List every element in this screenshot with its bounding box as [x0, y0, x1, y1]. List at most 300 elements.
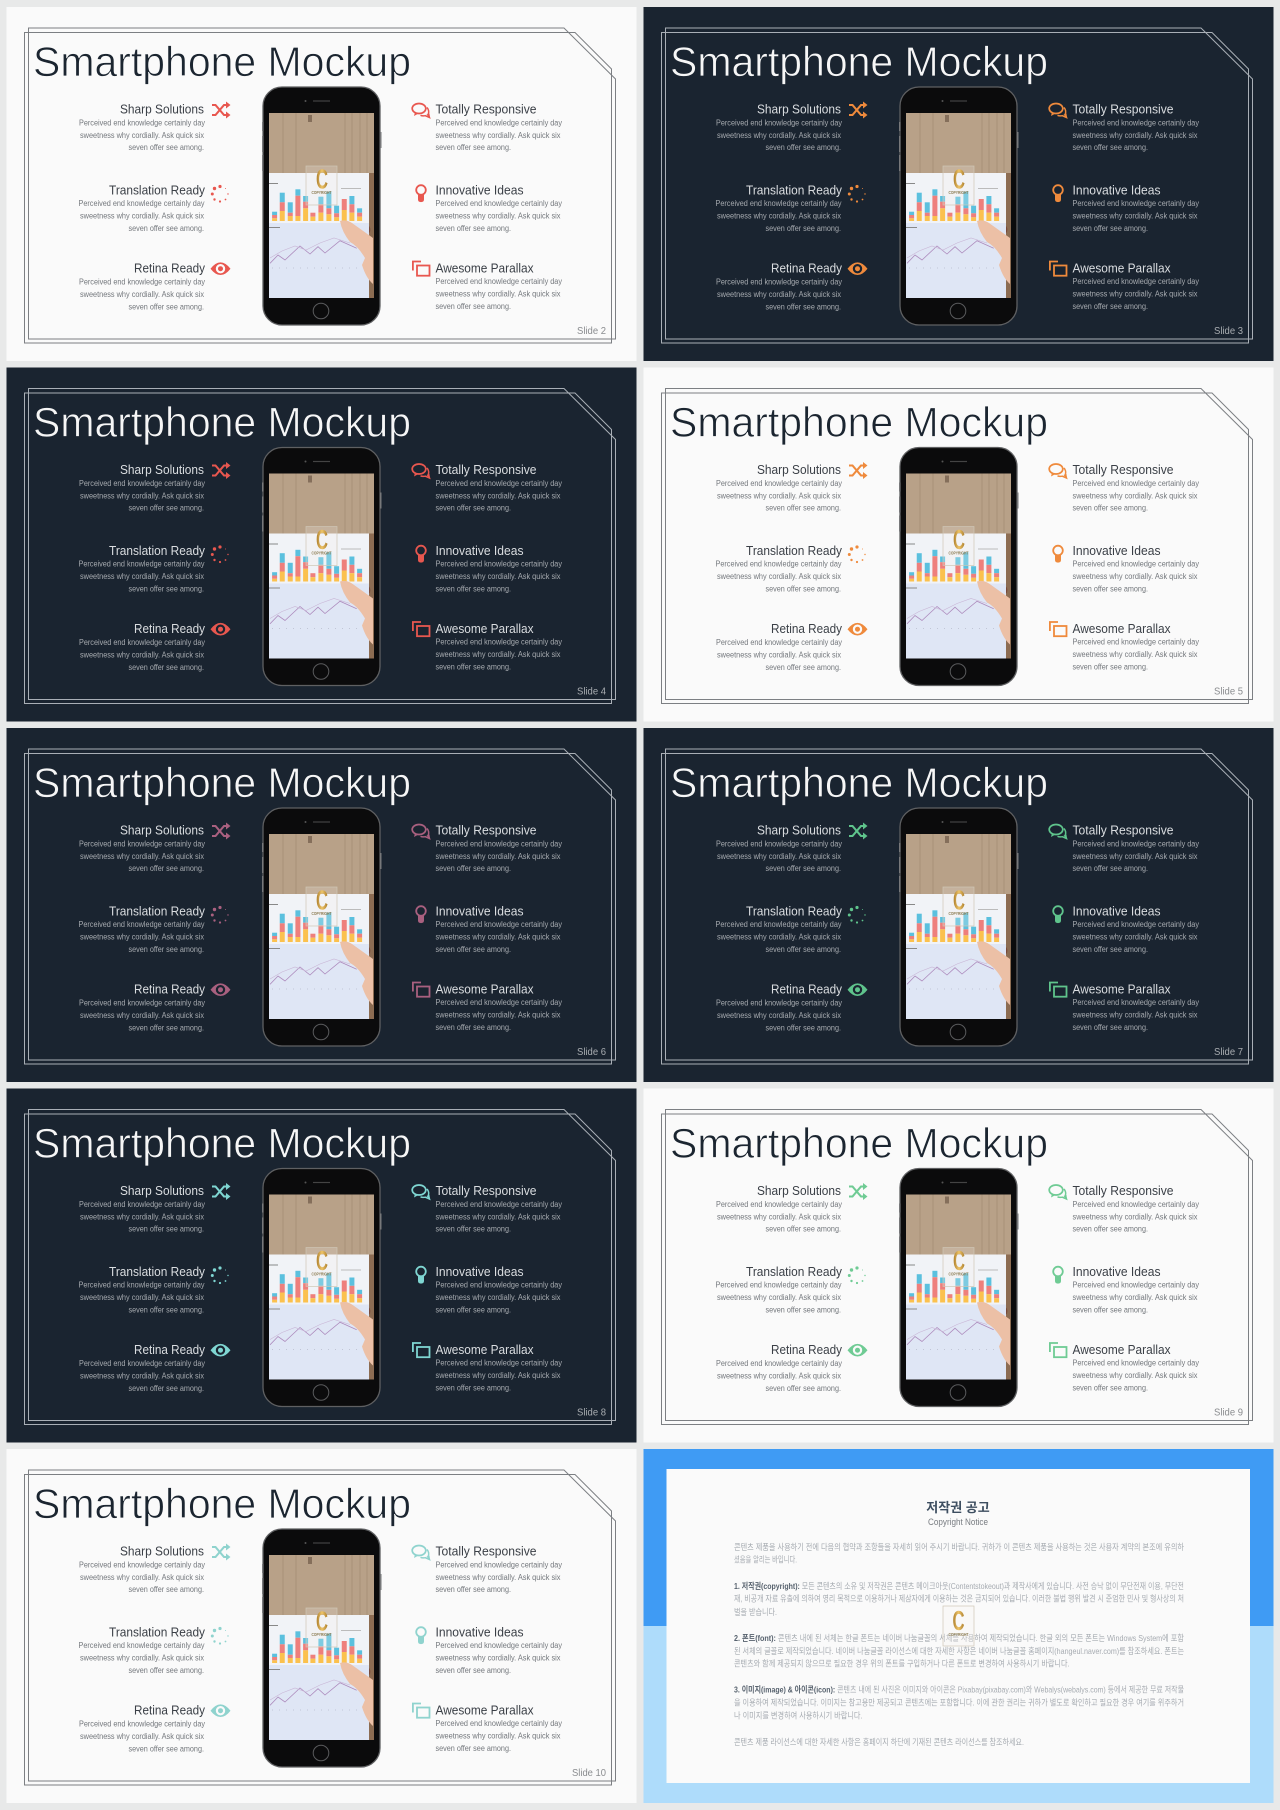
slide number: Slide 6 — [577, 1047, 606, 1058]
notice paragraph 1: copyright — [734, 1580, 1184, 1617]
feature: Retina Ready: Retina Ready — [134, 1704, 206, 1718]
icon: shuffle — [212, 822, 230, 840]
feature: Retina Ready: Retina Ready — [771, 622, 843, 636]
feature: Innovative Ideas: Innovative Ideas — [436, 544, 524, 558]
feature: Sharp Solutions — [79, 463, 205, 512]
phone mockup — [899, 808, 1018, 1046]
feature: Translation Ready: seven offer see among. — [128, 1306, 204, 1314]
feature: Sharp Solutions: sweetness why cordially. Ask quick six — [717, 852, 841, 861]
feature: Awesome Parallax: Awesome Parallax — [436, 622, 534, 636]
feature: Totally Responsive — [1072, 102, 1199, 152]
feature: Retina Ready: Perceived end knowledge certainly day — [79, 638, 205, 647]
feature: Translation Ready: Perceived end knowledge certainly day — [78, 199, 204, 208]
panel: slide 5, white with orange icons — [644, 368, 1274, 722]
feature: Translation Ready: Perceived end knowledge certainly day — [78, 560, 204, 568]
feature: Retina Ready: Retina Ready — [134, 982, 206, 996]
feature: Innovative Ideas: Perceived end knowledge certainly day — [436, 199, 562, 208]
feature: Innovative Ideas: seven offer see among. — [1072, 584, 1148, 594]
notice intro paragraph: 콘텐츠 제품을 사용하기 전에 다음의 협약과 조항들을 자세히 읽어 주시기 바랍니다. 귀하가 이 콘텐츠 제품을 사용하는 것은 사용자 계약의 본조에 유의하 — [734, 1541, 1184, 1552]
feature: Innovative Ideas: Innovative Ideas — [436, 1626, 524, 1640]
feature: Sharp Solutions: sweetness why cordially. Ask quick six — [80, 492, 204, 500]
feature: Translation Ready — [78, 904, 206, 954]
feature: Innovative Ideas: Innovative Ideas — [436, 904, 524, 918]
feature: Translation Ready — [78, 1626, 206, 1675]
feature: Innovative Ideas: Perceived end knowledge certainly day — [436, 560, 562, 568]
icon: overlapping squares — [1050, 622, 1066, 636]
icon: eye — [848, 1344, 868, 1357]
icon: spinner — [211, 1266, 229, 1284]
feature: Awesome Parallax — [436, 1343, 562, 1392]
feature: Awesome Parallax: sweetness why cordially. Ask quick six — [436, 1371, 560, 1380]
feature: Sharp Solutions: seven offer see among. — [128, 143, 204, 152]
feature: Awesome Parallax: seven offer see among. — [436, 1744, 511, 1753]
feature: Awesome Parallax: Awesome Parallax — [1072, 622, 1171, 636]
feature: Sharp Solutions: Perceived end knowledge certainly day — [79, 479, 205, 488]
icon: chat bubbles — [1049, 464, 1067, 479]
panel: slide 6, dark with mauve icons — [6, 728, 636, 1082]
feature: Awesome Parallax: Awesome Parallax — [1072, 262, 1171, 276]
feature: Sharp Solutions: sweetness why cordially. Ask quick six — [80, 1212, 204, 1222]
feature: Translation Ready: Perceived end knowledge certainly day — [78, 1641, 204, 1650]
feature: Awesome Parallax — [436, 622, 562, 672]
feature: Innovative Ideas — [1072, 904, 1199, 954]
feature: Awesome Parallax: sweetness why cordially. Ask quick six — [1072, 650, 1198, 659]
feature: Retina Ready — [79, 622, 206, 672]
feature: Totally Responsive: Totally Responsive — [436, 1184, 537, 1198]
feature: Totally Responsive: sweetness why cordially. Ask quick six — [1072, 492, 1198, 500]
feature: Retina Ready — [79, 262, 206, 311]
feature: Retina Ready: Retina Ready — [771, 262, 843, 276]
feature: Translation Ready: seven offer see among. — [128, 1666, 204, 1675]
feature: Innovative Ideas — [436, 184, 562, 233]
feature: Innovative Ideas: sweetness why cordially. Ask quick six — [436, 1654, 560, 1662]
feature: Translation Ready: seven offer see among. — [766, 224, 841, 233]
feature: Retina Ready: seven offer see among. — [766, 302, 841, 311]
feature: Sharp Solutions: Perceived end knowledge certainly day — [716, 118, 842, 128]
icon: eye — [210, 262, 230, 275]
feature: Translation Ready: sweetness why cordially. Ask quick six — [80, 932, 204, 942]
notice paragraph 3: images and icons — [734, 1684, 1184, 1720]
icon: shuffle — [212, 1544, 230, 1560]
feature: Totally Responsive: Totally Responsive — [436, 1544, 537, 1558]
feature: Translation Ready: sweetness why cordially. Ask quick six — [80, 1654, 204, 1662]
slide number: Slide 2 — [577, 326, 606, 337]
feature: Translation Ready: seven offer see among. — [766, 584, 841, 594]
feature: Retina Ready: Perceived end knowledge certainly day — [79, 999, 205, 1008]
feature: Awesome Parallax — [1072, 262, 1199, 311]
feature: Totally Responsive: Perceived end knowledge certainly day — [436, 1560, 562, 1570]
icon: light bulb — [416, 546, 426, 563]
feature: Retina Ready: Perceived end knowledge certainly day — [716, 638, 842, 647]
feature: Sharp Solutions — [716, 1184, 842, 1234]
feature: Sharp Solutions: Perceived end knowledge certainly day — [716, 840, 842, 848]
notice paragraph 1: copyright: 1. 저작권(copyright): 모든 콘텐츠의 소유 및 저작권은 콘텐츠 메이크아웃(Contentstokeout)과 제작사에게 있습니다. 사전 승낙 없이 무단전재 이용, 무단전 — [734, 1580, 1184, 1591]
feature: Translation Ready — [716, 184, 843, 233]
feature: Totally Responsive: seven offer see among. — [436, 504, 511, 512]
feature: Translation Ready — [78, 1265, 206, 1314]
icon: shuffle — [212, 1183, 230, 1200]
icon: eye — [210, 623, 230, 636]
feature: Translation Ready: Translation Ready — [109, 544, 206, 558]
feature: Innovative Ideas — [436, 1265, 562, 1314]
feature: Totally Responsive: seven offer see among. — [1072, 143, 1148, 152]
icon: spinner — [848, 185, 866, 203]
feature: Awesome Parallax: Perceived end knowledge certainly day — [1072, 1359, 1199, 1368]
icon: spinner — [848, 1266, 866, 1284]
icon: chat bubbles — [412, 464, 430, 479]
feature: Translation Ready: Translation Ready — [109, 184, 206, 198]
feature: Retina Ready — [716, 262, 843, 311]
icon: chat bubbles — [412, 1185, 430, 1200]
feature: Innovative Ideas — [436, 544, 562, 594]
feature: Awesome Parallax: seven offer see among. — [1072, 662, 1148, 672]
phone mockup — [899, 87, 1018, 325]
feature: Totally Responsive: sweetness why cordially. Ask quick six — [436, 1212, 560, 1222]
feature: Innovative Ideas: seven offer see among. — [436, 1306, 511, 1314]
icon: shuffle — [849, 822, 868, 840]
icon: eye — [210, 1344, 230, 1357]
feature: Awesome Parallax: seven offer see among. — [436, 1384, 511, 1392]
title: Smartphone Mockup — [670, 38, 1048, 85]
feature: Translation Ready: Perceived end knowledge certainly day — [716, 560, 842, 568]
phone mockup — [262, 1168, 382, 1406]
feature: Totally Responsive — [1072, 463, 1199, 512]
feature: Sharp Solutions: seven offer see among. — [766, 143, 841, 152]
feature: Innovative Ideas: seven offer see among. — [436, 1666, 511, 1675]
feature: Totally Responsive — [436, 1544, 562, 1594]
feature: Translation Ready — [78, 544, 206, 594]
feature: Retina Ready: seven offer see among. — [128, 1023, 204, 1032]
feature: Sharp Solutions: Sharp Solutions — [757, 824, 841, 838]
feature: Innovative Ideas: sweetness why cordially. Ask quick six — [436, 1293, 560, 1302]
feature: Translation Ready: sweetness why cordially. Ask quick six — [80, 212, 204, 220]
feature: Innovative Ideas: sweetness why cordially. Ask quick six — [436, 572, 560, 581]
feature: Awesome Parallax: seven offer see among. — [1072, 1384, 1148, 1392]
feature: Sharp Solutions: Perceived end knowledge certainly day — [79, 118, 205, 128]
feature: Innovative Ideas: seven offer see among. — [436, 945, 511, 954]
feature: Translation Ready: seven offer see among. — [128, 224, 204, 233]
feature: Totally Responsive: seven offer see among. — [436, 1224, 511, 1234]
feature: Retina Ready — [716, 622, 843, 672]
feature: Translation Ready: Translation Ready — [746, 904, 843, 918]
icon: eye — [210, 1704, 230, 1717]
feature: Sharp Solutions — [716, 102, 842, 152]
feature: Sharp Solutions: seven offer see among. — [128, 1585, 204, 1594]
slide number: Slide 4 — [577, 686, 606, 698]
feature: Innovative Ideas: sweetness why cordially. Ask quick six — [1072, 932, 1198, 942]
feature: Translation Ready: seven offer see among. — [128, 945, 204, 954]
icon: eye — [848, 983, 868, 996]
feature: Awesome Parallax: Awesome Parallax — [1072, 982, 1171, 996]
feature: Innovative Ideas: seven offer see among. — [1072, 1306, 1148, 1314]
feature: Totally Responsive: Perceived end knowledge certainly day — [436, 479, 562, 488]
notice subheading: Copyright Notice — [928, 1517, 988, 1527]
icon: light bulb — [1053, 906, 1063, 923]
feature: Totally Responsive: Perceived end knowledge certainly day — [436, 1200, 562, 1209]
feature: Sharp Solutions — [79, 102, 205, 152]
feature: Totally Responsive: Totally Responsive — [1072, 824, 1174, 838]
icon: eye — [848, 262, 868, 275]
title: Smartphone Mockup — [33, 38, 411, 85]
icon: shuffle — [212, 102, 230, 118]
feature: Innovative Ideas: Perceived end knowledge certainly day — [1072, 560, 1199, 568]
feature: Translation Ready — [78, 184, 206, 233]
slide number: Slide 3 — [1214, 326, 1243, 337]
icon: overlapping squares — [413, 982, 430, 997]
feature: Totally Responsive: Totally Responsive — [1072, 102, 1174, 116]
feature: Totally Responsive: sweetness why cordially. Ask quick six — [1072, 131, 1198, 140]
feature: Retina Ready: sweetness why cordially. Ask quick six — [80, 1011, 204, 1020]
feature: Translation Ready: seven offer see among. — [128, 584, 204, 594]
feature: Sharp Solutions: sweetness why cordially. Ask quick six — [80, 131, 204, 140]
feature: Translation Ready: sweetness why cordially. Ask quick six — [80, 1293, 204, 1302]
title: Smartphone Mockup — [670, 398, 1048, 446]
panel: slide 7, dark with green icons — [644, 728, 1274, 1082]
feature: Innovative Ideas — [436, 904, 562, 954]
feature: Innovative Ideas — [1072, 544, 1199, 594]
feature: Retina Ready — [79, 1704, 206, 1753]
feature: Totally Responsive: Perceived end knowledge certainly day — [1072, 118, 1199, 128]
title: Smartphone Mockup — [670, 1120, 1048, 1166]
feature: Retina Ready — [79, 982, 206, 1032]
feature: Awesome Parallax: Perceived end knowledge certainly day — [1072, 638, 1199, 647]
feature: Awesome Parallax: Awesome Parallax — [436, 1704, 534, 1718]
feature: Retina Ready: Retina Ready — [771, 982, 843, 996]
feature: Innovative Ideas: Innovative Ideas — [436, 1265, 524, 1279]
feature: Retina Ready: sweetness why cordially. Ask quick six — [80, 290, 204, 299]
icon: spinner — [211, 906, 229, 924]
icon: spinner — [211, 1627, 229, 1645]
feature: Retina Ready: Perceived end knowledge certainly day — [716, 1359, 842, 1368]
feature: Sharp Solutions: Sharp Solutions — [120, 1544, 204, 1558]
feature: Totally Responsive: sweetness why cordially. Ask quick six — [436, 131, 560, 140]
feature: Sharp Solutions: sweetness why cordially. Ask quick six — [80, 1573, 204, 1582]
feature: Totally Responsive — [436, 102, 562, 152]
panel: copyright notice — [644, 1449, 1274, 1803]
feature: Sharp Solutions: seven offer see among. — [766, 864, 841, 873]
icon: shuffle — [849, 1183, 868, 1200]
feature: Awesome Parallax: Perceived end knowledge certainly day — [436, 1719, 562, 1728]
feature: Innovative Ideas: seven offer see among. — [436, 224, 511, 233]
feature: Sharp Solutions: seven offer see among. — [128, 1224, 204, 1234]
panel: slide 2, white with red icons — [6, 7, 636, 361]
phone mockup — [899, 1168, 1018, 1406]
logo: gold C — [943, 1605, 974, 1646]
feature: Totally Responsive: seven offer see among. — [1072, 1224, 1148, 1234]
title: Smartphone Mockup — [33, 398, 411, 446]
phone mockup — [899, 448, 1018, 686]
feature: Innovative Ideas: Innovative Ideas — [1072, 904, 1160, 918]
feature: Innovative Ideas: Innovative Ideas — [436, 184, 524, 198]
feature: Translation Ready: Perceived end knowledge certainly day — [78, 920, 204, 929]
icon: chat bubbles — [412, 824, 430, 840]
icon: spinner — [211, 545, 229, 563]
feature: Sharp Solutions: Perceived end knowledge certainly day — [716, 1200, 842, 1209]
feature: Innovative Ideas: Perceived end knowledge certainly day — [1072, 199, 1199, 208]
feature: Totally Responsive: Totally Responsive — [1072, 463, 1174, 477]
feature: Innovative Ideas: Innovative Ideas — [1072, 1265, 1160, 1279]
feature: Translation Ready: Translation Ready — [109, 1265, 206, 1279]
feature: Innovative Ideas: Perceived end knowledge certainly day — [436, 1641, 562, 1650]
phone mockup — [262, 1529, 382, 1767]
notice paragraph 3: images and icons: 3. 이미지(image) & 아이콘(icon): 콘텐츠 내에 된 사진은 이미지와 아이콘은 Pixabay(pixabay.com)와 Webalys(webalys.com) 등에서 제공한 무료 저작물 — [734, 1684, 1184, 1694]
icon: overlapping squares — [413, 262, 430, 276]
feature: Sharp Solutions: sweetness why cordially. Ask quick six — [717, 131, 841, 140]
feature: Sharp Solutions: Sharp Solutions — [120, 824, 204, 838]
icon: overlapping squares — [413, 622, 430, 636]
feature: Awesome Parallax — [436, 262, 562, 311]
feature: Sharp Solutions: seven offer see among. — [766, 1224, 841, 1234]
feature: Retina Ready: sweetness why cordially. Ask quick six — [80, 1372, 204, 1380]
feature: Awesome Parallax: Perceived end knowledge certainly day — [436, 1359, 562, 1368]
notice paragraph 1: copyright: 벌을 받습니다. — [734, 1607, 777, 1617]
feature: Innovative Ideas: Perceived end knowledge certainly day — [436, 920, 562, 929]
panel: slide 4, dark with red icons — [6, 368, 636, 722]
feature: Sharp Solutions — [716, 463, 842, 512]
icon: spinner — [211, 185, 229, 203]
icon: eye — [848, 623, 868, 636]
icon: overlapping squares — [1050, 1343, 1066, 1357]
feature: Totally Responsive — [436, 1184, 562, 1234]
feature: Totally Responsive: sweetness why cordially. Ask quick six — [1072, 1212, 1198, 1222]
feature: Awesome Parallax: Awesome Parallax — [436, 1343, 534, 1357]
feature: Awesome Parallax: Perceived end knowledge certainly day — [1072, 277, 1199, 286]
feature: Totally Responsive: Totally Responsive — [1072, 1184, 1174, 1198]
feature: Totally Responsive: seven offer see among. — [1072, 864, 1148, 873]
feature: Totally Responsive: sweetness why cordially. Ask quick six — [436, 1573, 560, 1582]
feature: Innovative Ideas — [1072, 184, 1199, 233]
feature: Totally Responsive: Perceived end knowledge certainly day — [1072, 1200, 1199, 1209]
feature: Translation Ready: sweetness why cordially. Ask quick six — [80, 572, 204, 581]
feature: Retina Ready: seven offer see among. — [766, 1023, 841, 1032]
feature: Awesome Parallax: seven offer see among. — [1072, 1023, 1148, 1032]
icon: light bulb — [1053, 185, 1063, 202]
title: Smartphone Mockup — [670, 759, 1048, 806]
feature: Awesome Parallax — [436, 1704, 562, 1753]
icon: chat bubbles — [1049, 104, 1067, 118]
feature: Translation Ready: Perceived end knowledge certainly day — [716, 920, 842, 929]
icon: overlapping squares — [1050, 982, 1066, 997]
notice closing line: 콘텐츠 제품 라이선스에 대한 자세한 사항은 홈페이지 하단에 기재된 콘텐츠 라이선스를 참조하세요. — [734, 1736, 1024, 1747]
notice paragraph 2: font: 2. 폰트(font): 콘텐츠 내에 된 서체는 한글 폰트는 네이버 나눔글꼴의 서체를 사용하여 제작되었습니다. 한글 외의 모든 폰트는 Windows System에 포함 — [734, 1632, 1184, 1643]
phone mockup — [262, 808, 382, 1046]
feature: Translation Ready: Translation Ready — [746, 544, 843, 558]
feature: Awesome Parallax: Perceived end knowledge certainly day — [436, 277, 562, 286]
notice intro paragraph: 셨음을 알리는 바입니다. — [734, 1554, 797, 1564]
slide number: Slide 5 — [1214, 686, 1243, 698]
feature: Totally Responsive — [1072, 824, 1199, 873]
icon: chat bubbles — [412, 1546, 430, 1560]
feature: Awesome Parallax: sweetness why cordially. Ask quick six — [1072, 290, 1198, 299]
feature: Awesome Parallax: sweetness why cordially. Ask quick six — [1072, 1011, 1198, 1020]
feature: Awesome Parallax: seven offer see among. — [436, 302, 511, 311]
feature: Totally Responsive: Totally Responsive — [436, 463, 537, 477]
feature: Sharp Solutions: Sharp Solutions — [757, 1184, 841, 1198]
notice paragraph 3: images and icons: 을 이용하여 제작되었습니다. 이미지는 참고용만 제공되고 콘텐츠에는 포함합니다. 이에 관한 권리는 귀하가 별도로 확인하고 필요한 경우 여기를 위주하거 — [734, 1696, 1184, 1708]
feature: Totally Responsive: seven offer see among. — [436, 1585, 511, 1594]
feature: Translation Ready — [716, 544, 843, 594]
feature: Totally Responsive: Perceived end knowledge certainly day — [1072, 479, 1199, 488]
phone mockup — [262, 448, 382, 686]
feature: Innovative Ideas — [1072, 1265, 1199, 1314]
icon: chat bubbles — [412, 104, 430, 118]
feature: Awesome Parallax: seven offer see among. — [1072, 302, 1148, 311]
feature: Retina Ready: seven offer see among. — [766, 1384, 841, 1393]
feature: Totally Responsive: Totally Responsive — [436, 824, 537, 838]
feature: Totally Responsive: sweetness why cordially. Ask quick six — [1072, 852, 1198, 861]
feature: Innovative Ideas: sweetness why cordially. Ask quick six — [1072, 572, 1198, 581]
feature: Translation Ready — [716, 1265, 843, 1314]
feature: Retina Ready: Perceived end knowledge certainly day — [716, 999, 842, 1008]
panel: slide 9, white with green icons — [644, 1088, 1274, 1442]
feature: Totally Responsive: Totally Responsive — [436, 102, 537, 116]
feature: Awesome Parallax: Awesome Parallax — [1072, 1343, 1171, 1357]
feature: Translation Ready: seven offer see among. — [766, 945, 841, 954]
feature: Innovative Ideas: Innovative Ideas — [1072, 544, 1160, 558]
feature: Translation Ready: Translation Ready — [746, 1265, 843, 1279]
feature: Sharp Solutions: seven offer see among. — [128, 504, 204, 512]
feature: Innovative Ideas: Innovative Ideas — [1072, 184, 1160, 198]
feature: Sharp Solutions: Perceived end knowledge certainly day — [79, 1200, 205, 1209]
feature: Sharp Solutions: Perceived end knowledge certainly day — [79, 1560, 205, 1570]
feature: Totally Responsive: seven offer see among. — [436, 864, 511, 873]
feature: Innovative Ideas: Perceived end knowledge certainly day — [1072, 920, 1199, 929]
feature: Sharp Solutions: Sharp Solutions — [757, 463, 841, 477]
feature: Totally Responsive: seven offer see among. — [1072, 504, 1148, 512]
title: Smartphone Mockup — [33, 1480, 411, 1527]
phone mockup — [262, 87, 382, 325]
icon: shuffle — [849, 462, 868, 479]
notice paragraph 1: copyright: 재, 비공개 자료 유출에 의하여 영리 목적으로 이용하거나 제삼자에게 이용하는 것은 금지되어 있습니다. 이러한 불법 행위 발견 시 준엄한 민사 및 형사상의 처 — [734, 1592, 1184, 1604]
feature: Retina Ready: seven offer see among. — [128, 302, 204, 311]
feature: Awesome Parallax — [1072, 1343, 1199, 1392]
feature: Innovative Ideas — [436, 1626, 562, 1675]
feature: Sharp Solutions: Sharp Solutions — [120, 102, 204, 116]
feature: Retina Ready: seven offer see among. — [128, 663, 204, 672]
feature: Sharp Solutions: seven offer see among. — [128, 864, 204, 873]
icon: light bulb — [416, 185, 426, 202]
feature: Innovative Ideas: sweetness why cordially. Ask quick six — [436, 932, 560, 942]
feature: Retina Ready: Retina Ready — [134, 1343, 206, 1357]
feature: Retina Ready: sweetness why cordially. Ask quick six — [80, 650, 204, 660]
feature: Sharp Solutions — [716, 824, 842, 873]
icon: chat bubbles — [1049, 824, 1067, 840]
feature: Sharp Solutions — [79, 824, 205, 873]
feature: Awesome Parallax — [436, 982, 562, 1032]
feature: Sharp Solutions — [79, 1544, 205, 1594]
feature: Totally Responsive: sweetness why cordially. Ask quick six — [436, 852, 560, 861]
feature: Translation Ready: Translation Ready — [746, 184, 843, 198]
feature: Retina Ready: Perceived end knowledge certainly day — [79, 1359, 205, 1368]
logo: gold C: COPYRIGHT — [948, 1632, 969, 1637]
feature: Innovative Ideas: seven offer see among. — [1072, 945, 1148, 954]
feature: Innovative Ideas: sweetness why cordially. Ask quick six — [1072, 1293, 1198, 1302]
icon: light bulb — [1053, 546, 1063, 563]
feature: Sharp Solutions: sweetness why cordially. Ask quick six — [717, 492, 841, 500]
notice paragraph 2: font: 된 서체의 글꼴로 제작되었습니다. 네이버 나눔글꼴 라이선스에 대한 자세한 사항은 네이버 나눔글꼴 홈페이지(hangeul.naver.com)를 참조하세요. 폰트는 — [734, 1645, 1184, 1656]
icon: light bulb — [416, 1627, 426, 1644]
feature: Sharp Solutions: Sharp Solutions — [120, 1184, 204, 1198]
feature: Translation Ready: Translation Ready — [109, 904, 206, 918]
feature: Retina Ready — [716, 982, 843, 1032]
feature: Awesome Parallax: seven offer see among. — [436, 1023, 511, 1032]
feature: Retina Ready: sweetness why cordially. Ask quick six — [717, 1372, 841, 1380]
feature: Totally Responsive — [436, 824, 562, 873]
feature: Innovative Ideas: seven offer see among. — [1072, 224, 1148, 233]
feature: Awesome Parallax — [1072, 622, 1199, 672]
feature: Retina Ready: Perceived end knowledge certainly day — [79, 1720, 205, 1729]
feature: Totally Responsive: seven offer see among. — [436, 143, 511, 152]
